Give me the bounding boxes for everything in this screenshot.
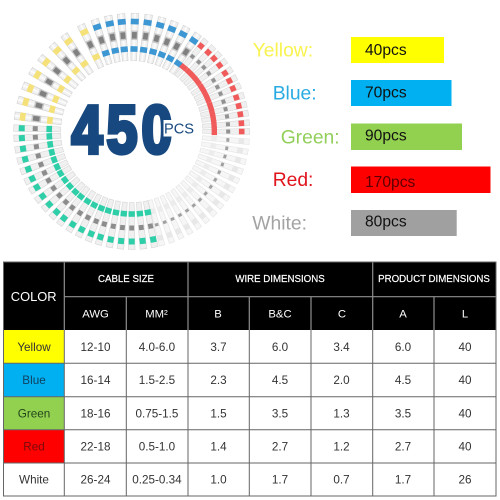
table header: B xyxy=(214,308,222,320)
yellow terminals xyxy=(14,23,105,126)
table header: L xyxy=(462,308,468,320)
table header: MM² xyxy=(145,308,168,320)
table data: 12-10 xyxy=(81,341,111,354)
table data: 1.7 xyxy=(395,474,411,486)
color swatch cells: Green xyxy=(18,408,50,420)
blue terminals xyxy=(91,13,202,75)
legend: red: 170pcs xyxy=(365,174,415,191)
table data: 40 xyxy=(458,374,472,387)
table header: WIRE DIMENSIONS xyxy=(235,274,325,285)
table data: 26-24 xyxy=(81,474,111,486)
table header: CABLE SIZE xyxy=(98,274,155,285)
table header: C xyxy=(338,308,346,320)
table data: 0.25-0.34 xyxy=(132,474,182,486)
table data: 16-14 xyxy=(81,374,111,387)
legend: yellow: 40pcs xyxy=(365,42,407,59)
table data: 2.0 xyxy=(333,374,350,387)
table data: 2.7 xyxy=(272,440,288,454)
green terminals xyxy=(14,125,158,250)
table data: 3.5 xyxy=(395,408,412,420)
table data: 18-16 xyxy=(81,408,110,420)
table data: 3.5 xyxy=(272,408,289,420)
legend: blue xyxy=(273,80,452,106)
legend: blue: 70pcs xyxy=(365,84,407,102)
color swatch cells: Yellow xyxy=(17,341,51,354)
table data: 4.0-6.0 xyxy=(139,341,176,354)
table data xyxy=(81,341,472,486)
quantity title 450 PCS: PCS xyxy=(164,121,194,137)
table data: 0.75-1.5 xyxy=(136,408,179,420)
color swatch cells: Blue xyxy=(22,374,46,387)
color swatch cells: Red xyxy=(23,440,45,454)
table data: 1.5-2.5 xyxy=(139,374,176,387)
table grid xyxy=(3,262,496,496)
table data: 1.5 xyxy=(210,408,227,420)
legend: white xyxy=(252,210,457,236)
table data: 2.3 xyxy=(210,374,227,387)
table header: B&C xyxy=(268,308,292,320)
white terminals xyxy=(147,135,250,246)
table data: 3.7 xyxy=(210,341,227,354)
legend: green xyxy=(281,124,462,150)
table data: 1.0 xyxy=(210,474,227,486)
table data: 4.5 xyxy=(272,374,289,387)
legend: red: Red: xyxy=(273,170,313,191)
legend: white: 80pcs xyxy=(365,214,407,231)
table header: PRODUCT DIMENSIONS xyxy=(378,274,490,285)
legend: blue: Blue: xyxy=(273,83,317,104)
table data: 1.4 xyxy=(210,440,227,454)
table data: 1.7 xyxy=(272,474,288,486)
legend: yellow xyxy=(253,37,444,63)
quantity title 450 PCS: 450 xyxy=(72,93,177,168)
table data: 6.0 xyxy=(395,341,412,354)
table header: AWG xyxy=(82,308,109,320)
table data: 40 xyxy=(458,341,472,354)
table data: 26 xyxy=(458,474,472,486)
table data: 40 xyxy=(458,408,472,420)
table data: 3.4 xyxy=(333,341,350,354)
color swatch cells: White xyxy=(19,474,49,486)
table header xyxy=(3,262,496,330)
legend: green: Green: xyxy=(281,127,340,148)
legend: yellow: Yellow: xyxy=(253,41,313,62)
table data: 0.5-1.0 xyxy=(139,440,176,454)
legend: green: 90pcs xyxy=(365,128,407,145)
table data: 2.7 xyxy=(395,440,411,454)
table data: 1.2 xyxy=(333,440,350,454)
legend: white: White: xyxy=(252,213,307,234)
table data: 1.3 xyxy=(333,408,350,420)
table data: 22-18 xyxy=(81,440,110,454)
table data: 0.7 xyxy=(333,474,350,486)
specification table xyxy=(3,262,496,496)
table data: 4.5 xyxy=(395,374,412,387)
table data: 40 xyxy=(458,440,472,454)
terminal ring xyxy=(14,13,250,249)
legend: red xyxy=(273,166,490,193)
table data: 6.0 xyxy=(272,341,289,354)
red terminals xyxy=(174,38,250,135)
color swatch cells xyxy=(4,330,64,486)
table header: A xyxy=(399,308,407,320)
table header: COLOR xyxy=(11,289,57,304)
